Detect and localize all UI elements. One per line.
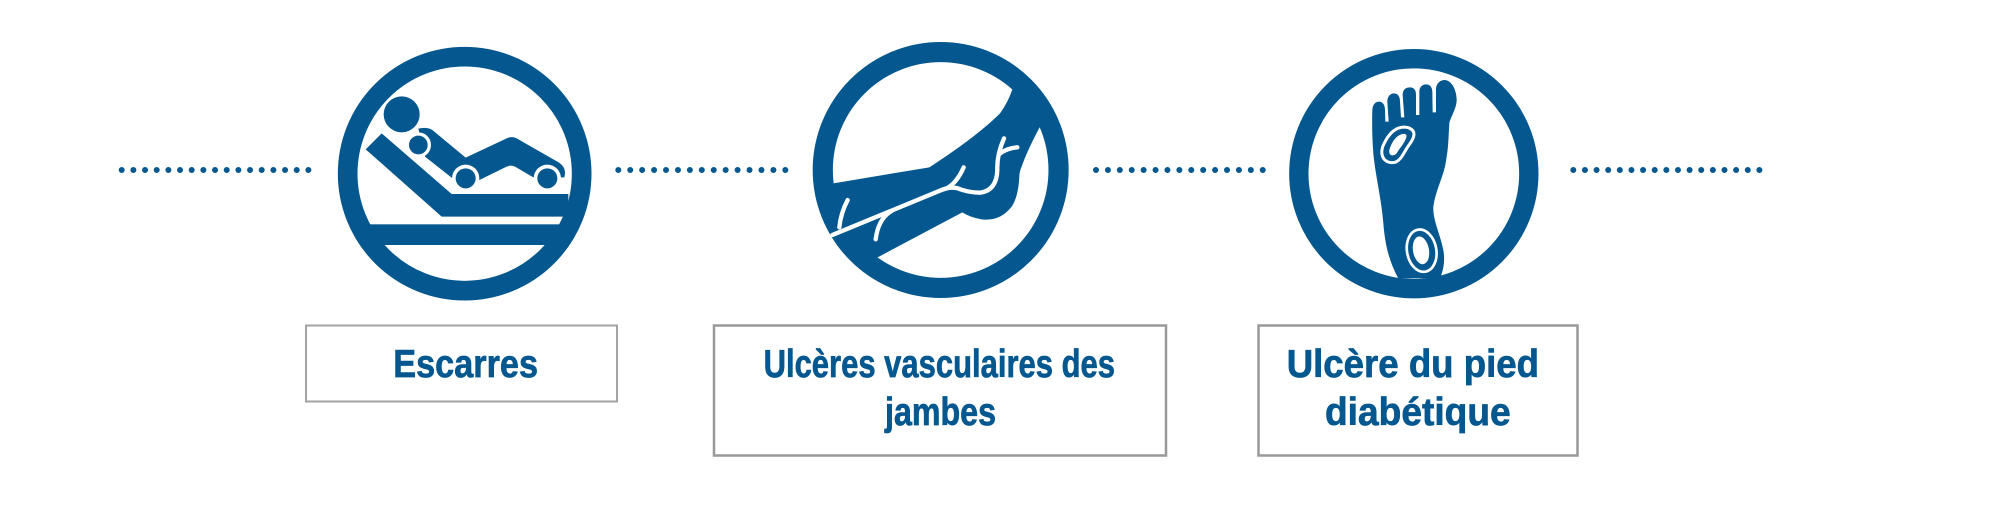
label box: Escarres: Escarres (393, 343, 538, 386)
dotted connector 1 (122, 167, 308, 173)
icon: patient in bed (348, 57, 582, 291)
icon: leg with veins (823, 52, 1059, 288)
label box: Ulcère du pied diabétique: Ulcère du pied (1287, 343, 1539, 386)
label box: Ulcère du pied diabétique (1258, 326, 1578, 456)
label box: Ulcères vasculaires des jambes: jambes (884, 391, 996, 434)
dotted connector 2 (618, 167, 785, 173)
label box: Escarres (306, 326, 617, 402)
infographic canvas (118, 42, 1762, 457)
dotted connector 3 (1096, 167, 1263, 173)
label box: Ulcère du pied diabétique: diabétique (1325, 391, 1511, 434)
icon: foot with ulcers (1299, 59, 1529, 289)
dotted connector 4 (1573, 167, 1759, 173)
label box: Ulcères vasculaires des jambes: Ulcères vasculaires des (764, 343, 1115, 386)
label box: Ulcères vasculaires des jambes (714, 326, 1166, 456)
